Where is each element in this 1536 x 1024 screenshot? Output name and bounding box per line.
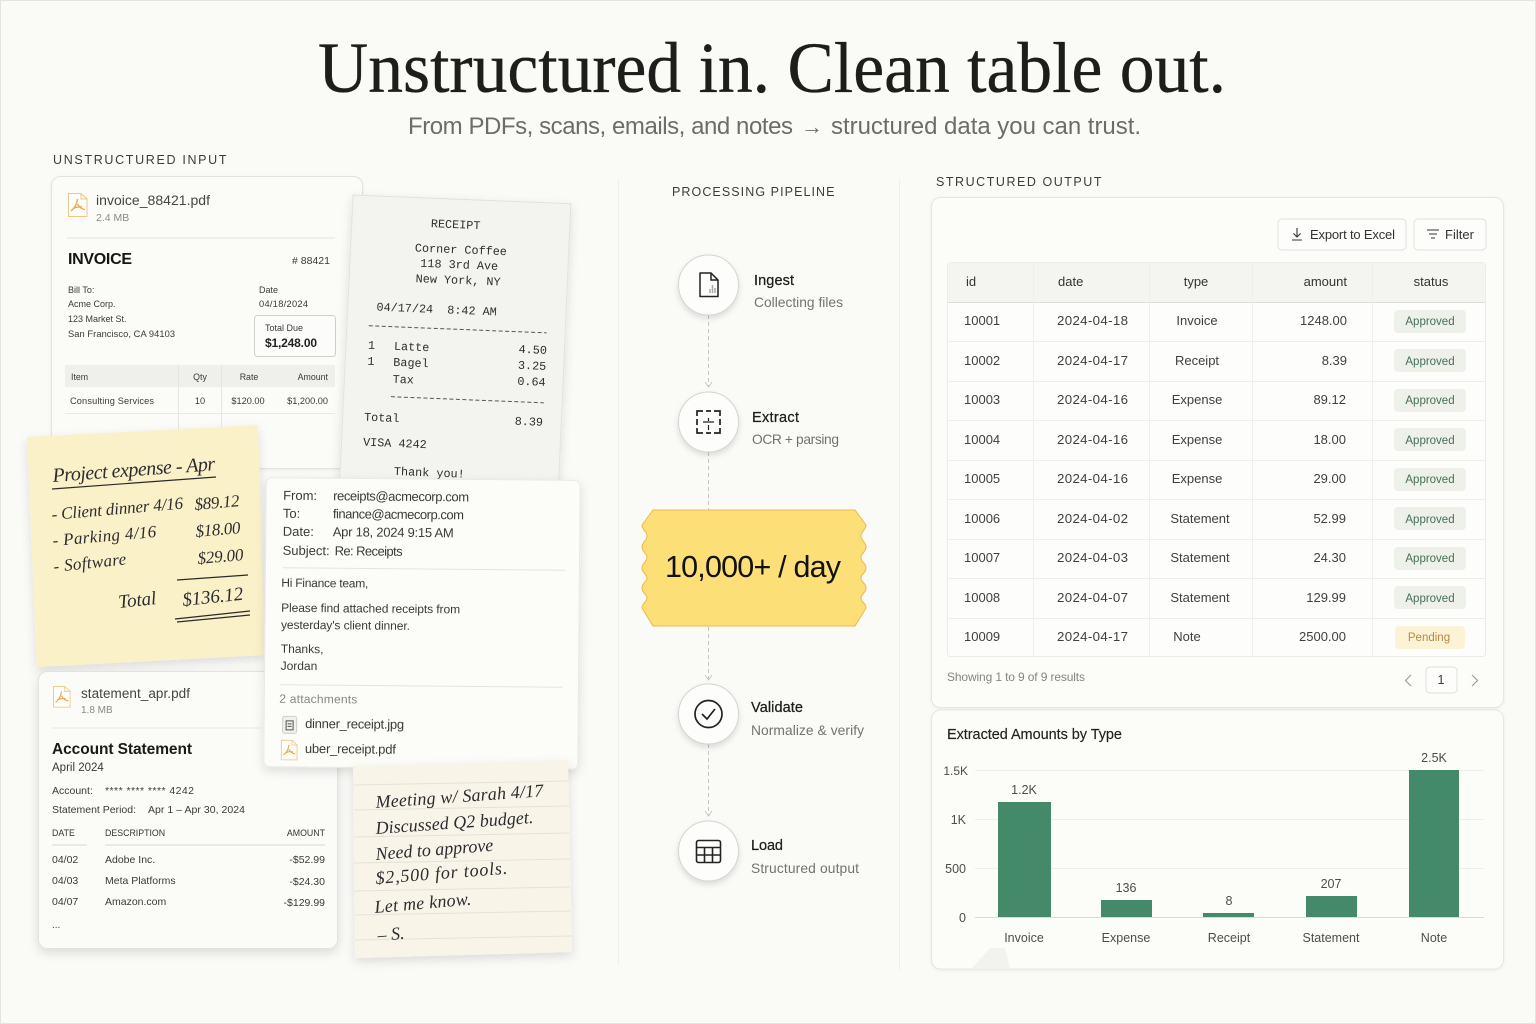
expense lines: - Software — [52, 549, 127, 576]
statement heading: Account Statement — [52, 741, 192, 758]
row 10009: Pending — [1408, 632, 1450, 644]
row 10008: Statement — [1170, 590, 1230, 605]
row 10005: 29.00 — [1313, 471, 1346, 486]
row 10007: 10007 — [964, 550, 1000, 565]
icon: pdf file — [281, 740, 297, 760]
row 10007: Approved — [1405, 553, 1455, 565]
connector: extract to ticket — [708, 452, 710, 510]
bill to block: San Francisco, CA 94103 — [68, 329, 175, 339]
callout: throughput ticket — [642, 510, 866, 626]
account details: Statement Period: — [52, 804, 136, 816]
row 10002: 8.39 — [1322, 353, 1347, 368]
y axis labels — [943, 764, 968, 925]
step: validate: Validate — [751, 700, 803, 716]
row 10007: 2024-04-03 — [1057, 550, 1128, 565]
attachments list: 2 attachments — [279, 692, 357, 706]
total due box: Total Due — [265, 323, 303, 333]
row 10004: 10004 — [964, 432, 1000, 447]
step: load — [678, 821, 859, 881]
pagination — [1406, 667, 1478, 693]
heading: processing pipeline: PROCESSING PIPELINE — [672, 185, 836, 199]
panel: paper receipt: VISA 4242 — [363, 436, 427, 452]
panel: paper receipt: Thank you! — [394, 465, 465, 482]
table footer text: Showing 1 to 9 of 9 results — [947, 670, 1085, 684]
subtitle: → — [801, 114, 823, 139]
callout: throughput ticket: 10,000+ / day — [665, 550, 842, 584]
invoice heading: INVOICE — [68, 251, 132, 268]
row 10006: Approved — [1405, 514, 1455, 526]
row 10005: Approved — [1405, 474, 1455, 486]
bars — [998, 770, 1459, 917]
x axis labels: Note — [1421, 931, 1447, 945]
row 10004: Expense — [1172, 432, 1222, 447]
row 10006: Statement — [1170, 511, 1230, 526]
subtitle: structured data you can trust. — [831, 113, 1141, 140]
button: export to excel — [1278, 219, 1406, 250]
row 10008: 2024-04-07 — [1057, 590, 1128, 605]
panel: invoice document: # 88421 — [292, 255, 330, 267]
panel: paper receipt: 04/17/24 8:42 AM — [376, 301, 497, 319]
statement transactions table: 04/02 — [52, 854, 78, 866]
button: filter — [1414, 219, 1486, 250]
invoice line item table: Amount — [298, 372, 329, 382]
icon: check circle — [695, 700, 722, 728]
row 10009: 10009 — [964, 629, 1000, 644]
row 10001: Approved — [1405, 316, 1455, 328]
x axis labels — [1004, 931, 1447, 945]
invoice line item table — [65, 365, 335, 440]
invoice line item table: Rate — [240, 372, 258, 382]
row 10007: Statement — [1170, 550, 1230, 565]
note text: Discussed Q2 budget. — [374, 807, 534, 838]
title: Unstructured in. Clean table out. — [318, 28, 1226, 108]
x axis labels: Expense — [1102, 931, 1150, 945]
icon: image file — [283, 716, 297, 733]
receipt items: Bagel — [393, 356, 429, 371]
step: ingest — [678, 255, 843, 315]
email headers — [283, 488, 469, 559]
row 10002: 2024-04-17 — [1057, 353, 1128, 368]
row 10006: 2024-04-02 — [1057, 511, 1128, 526]
row 10001: 1248.00 — [1300, 313, 1347, 328]
panel: invoice document: 2.4 MB — [96, 212, 129, 224]
x axis labels: Receipt — [1208, 931, 1251, 945]
bar value labels: 2.5K — [1421, 751, 1448, 765]
email body: yesterday's client dinner. — [281, 618, 410, 633]
subtitle — [408, 113, 1141, 140]
subtitle: From PDFs, scans, emails, and notes — [408, 113, 793, 140]
panel: bank statement document — [38, 672, 338, 948]
row 10004: 18.00 — [1313, 432, 1346, 447]
panel: structured table — [932, 198, 1504, 708]
email headers: Date: — [283, 524, 314, 539]
row 10009: 2500.00 — [1299, 629, 1346, 644]
pagination: 1 — [1438, 673, 1445, 687]
panel: paper receipt: 8.39 — [514, 415, 543, 430]
connector arrow: ticket to validate — [705, 627, 712, 680]
row 10008: 10008 — [964, 590, 1000, 605]
panel: yellow sticky note — [27, 425, 265, 667]
panel: ruled handwritten note — [353, 760, 572, 958]
row 10001: 2024-04-18 — [1057, 313, 1128, 328]
step: load: Load — [751, 838, 783, 854]
panel: paper receipt: RECEIPT — [431, 217, 481, 233]
statement filename: statement_apr.pdf — [81, 686, 190, 701]
row 10002 — [964, 349, 1466, 372]
row 10009: 2024-04-17 — [1057, 629, 1128, 644]
row 10005: Expense — [1172, 471, 1222, 486]
statement transactions table: ... — [52, 920, 60, 931]
connector arrow: ingest to extract — [705, 315, 712, 387]
merchant address: 118 3rd Ave — [420, 257, 498, 274]
bar value labels: 1.2K — [1011, 783, 1038, 797]
bar value labels — [1011, 751, 1448, 908]
account details: Account: — [52, 785, 93, 797]
row 10003: 2024-04-16 — [1057, 392, 1128, 407]
invoice line item table: Item — [71, 372, 88, 382]
panel: paper receipt: Total — [364, 411, 400, 426]
icon: pdf file — [68, 194, 87, 216]
note text: Let me know. — [373, 889, 472, 917]
row 10009 — [964, 626, 1465, 649]
statement transactions table: Meta Platforms — [105, 875, 176, 887]
panel: bank statement document: April 2024 — [52, 762, 104, 774]
bar value labels: 207 — [1321, 877, 1341, 891]
expense lines: $29.00 — [197, 545, 245, 568]
email headers: From: — [283, 488, 317, 503]
receipt items: Tax — [392, 373, 414, 388]
statement transactions table: DATE — [52, 828, 75, 838]
note heading: Project expense - Apr — [51, 453, 216, 487]
bar value labels: 8 — [1226, 894, 1233, 908]
row 10005: 10005 — [964, 471, 1000, 486]
row 10001: 10001 — [964, 313, 1000, 328]
step: extract — [678, 392, 839, 452]
statement transactions table: Amazon.com — [105, 896, 167, 908]
invoice line item table: Consulting Services — [70, 396, 154, 406]
table header: amount — [1304, 274, 1347, 289]
email headers: Apr 18, 2024 9:15 AM — [333, 524, 454, 540]
statement transactions table: -$24.30 — [289, 876, 325, 888]
button: filter: Filter — [1445, 227, 1475, 242]
note text: Meeting w/ Sarah 4/17 — [374, 780, 545, 812]
merchant address: New York, NY — [415, 272, 501, 289]
heading: unstructured input: UNSTRUCTURED INPUT — [53, 153, 228, 167]
row 10006: 10006 — [964, 511, 1000, 526]
row 10007: 24.30 — [1313, 550, 1346, 565]
expense lines — [51, 491, 245, 576]
row 10008: 129.99 — [1306, 590, 1346, 605]
row 10009: Note — [1173, 629, 1201, 644]
email headers: Subject: — [283, 543, 330, 558]
receipt items: 4.50 — [518, 343, 547, 358]
account details: Apr 1 – Apr 30, 2024 — [148, 804, 245, 816]
table header: type — [1184, 274, 1208, 289]
step: extract: OCR + parsing — [752, 432, 839, 447]
y axis labels: 500 — [945, 862, 966, 876]
row 10003: 10003 — [964, 392, 1000, 407]
icon: document — [700, 273, 718, 296]
account details — [52, 785, 245, 816]
expense lines: - Client dinner 4/16 — [51, 494, 184, 524]
email headers: receipts@acmecorp.com — [333, 488, 469, 504]
email body: Thanks, — [281, 642, 324, 656]
statement transactions table — [52, 828, 326, 931]
email body: Hi Finance team, — [281, 576, 368, 591]
bill to block: Date — [259, 285, 278, 295]
receipt items: 3.25 — [518, 359, 547, 374]
attachments list: dinner_receipt.jpg — [305, 716, 404, 732]
row 10005: 2024-04-16 — [1057, 471, 1128, 486]
step: ingest: Collecting files — [754, 295, 843, 310]
row 10002: 10002 — [964, 353, 1000, 368]
note text — [373, 780, 545, 945]
note text: – S. — [376, 923, 405, 945]
step: validate — [678, 684, 864, 744]
bill to block: 123 Market St. — [68, 314, 127, 324]
row 10008: Approved — [1405, 593, 1455, 605]
bill to block: 04/18/2024 — [259, 299, 308, 309]
invoice line item table: Qty — [193, 372, 207, 382]
merchant address: Corner Coffee — [415, 242, 507, 259]
bill to block: Bill To: — [68, 285, 94, 295]
row 10004: Approved — [1405, 435, 1455, 447]
y axis labels: 0 — [959, 911, 966, 925]
step: ingest: Ingest — [754, 273, 794, 289]
receipt items: 1 — [368, 339, 375, 353]
heading: structured output: STRUCTURED OUTPUT — [936, 175, 1103, 189]
icon: pdf file — [53, 686, 70, 707]
attachments list: uber_receipt.pdf — [305, 741, 396, 757]
panel: bank statement document: 1.8 MB — [81, 705, 113, 716]
email body — [281, 576, 460, 674]
y axis labels: 1.5K — [943, 764, 968, 778]
account details: **** **** **** 4242 — [105, 785, 194, 797]
expense lines: $18.00 — [195, 518, 242, 541]
email body: Please find attached receipts from — [281, 601, 460, 616]
attachments list — [279, 692, 404, 761]
invoice filename: invoice_88421.pdf — [96, 192, 210, 208]
email headers: To: — [283, 506, 300, 521]
note total: Total — [117, 588, 157, 613]
icon: table grid — [696, 840, 720, 862]
x axis labels: Statement — [1303, 931, 1360, 945]
receipt items — [366, 337, 547, 393]
total due box — [254, 316, 336, 356]
statement transactions table: AMOUNT — [287, 828, 326, 838]
table header — [966, 274, 1449, 289]
row 10003: Expense — [1172, 392, 1222, 407]
row 10003 — [964, 389, 1466, 412]
statement transactions table: 04/03 — [52, 875, 78, 887]
row 10003: Approved — [1405, 395, 1455, 407]
row 10007 — [964, 547, 1466, 570]
receipt items: Latte — [394, 340, 430, 355]
button: export to excel: Export to Excel — [1310, 227, 1395, 242]
invoice line item table: 10 — [195, 396, 205, 406]
panel: bar chart card — [932, 710, 1504, 969]
panel: paper receipt — [339, 195, 571, 504]
icon: scan frame — [697, 411, 720, 433]
y axis labels: 1K — [951, 813, 967, 827]
data table — [948, 262, 1486, 656]
statement transactions table: Adobe Inc. — [105, 854, 155, 866]
bill to block: Acme Corp. — [68, 299, 116, 309]
bill to block — [68, 285, 308, 339]
step: validate: Normalize & verify — [751, 723, 864, 738]
x axis labels: Invoice — [1004, 931, 1044, 945]
row 10004: 2024-04-16 — [1057, 432, 1128, 447]
row 10001: Invoice — [1176, 313, 1218, 328]
expense lines: $89.12 — [194, 491, 241, 514]
connector arrow: validate to load — [705, 744, 712, 816]
chart title: Extracted Amounts by Type — [947, 727, 1122, 743]
row 10002: Receipt — [1175, 353, 1219, 368]
invoice line item table: $120.00 — [231, 396, 265, 406]
note total: $136.12 — [181, 584, 245, 611]
table header: status — [1414, 274, 1449, 289]
panel: invoice document — [52, 176, 362, 468]
email headers: Re: Receipts — [335, 543, 403, 559]
invoice line item table: $1,200.00 — [287, 396, 328, 406]
note text: Need to approve — [374, 835, 494, 864]
total due box: $1,248.00 — [265, 336, 317, 350]
statement transactions table: 04/07 — [52, 896, 78, 908]
row 10002: Approved — [1405, 356, 1455, 368]
row 10006: 52.99 — [1313, 511, 1346, 526]
statement transactions table: -$129.99 — [284, 897, 325, 909]
note text: $2,500 for tools. — [375, 858, 508, 888]
email body: Jordan — [281, 659, 317, 673]
row 10001 — [964, 310, 1466, 333]
receipt items: 1 — [367, 355, 375, 369]
panel: email — [264, 478, 580, 769]
receipt items: 0.64 — [517, 375, 546, 390]
note total — [117, 584, 245, 613]
expense lines: - Parking 4/16 — [52, 522, 157, 550]
statement transactions table: -$52.99 — [289, 854, 325, 866]
statement transactions table: DESCRIPTION — [105, 828, 165, 838]
row 10004 — [964, 428, 1466, 451]
bar value labels: 136 — [1116, 881, 1136, 895]
row 10003: 89.12 — [1313, 392, 1346, 407]
table header: date — [1058, 274, 1083, 289]
row 10005 — [964, 468, 1466, 491]
step: extract: Extract — [752, 410, 799, 426]
row 10008 — [964, 586, 1466, 609]
table header: id — [966, 274, 976, 289]
step: load: Structured output — [751, 861, 859, 876]
row 10006 — [964, 507, 1466, 530]
merchant address — [413, 242, 507, 290]
email headers: finance@acmecorp.com — [333, 506, 464, 522]
